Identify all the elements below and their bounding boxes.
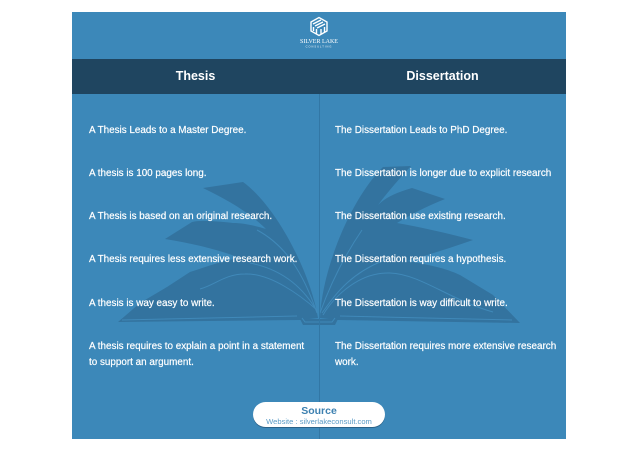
dissertation row 4: The Dissertation requires a hypothesis.: [335, 254, 506, 265]
heading: Dissertation: Dissertation: [406, 69, 479, 83]
heading: Thesis: Thesis: [176, 69, 215, 83]
thesis row 2: A thesis is 100 pages long.: [89, 168, 206, 179]
dissertation row 6: [334, 341, 556, 368]
column divider: [319, 94, 320, 439]
dissertation row 6: work.: [335, 357, 359, 368]
source website: Website : silverlakeconsult.com: [266, 417, 372, 426]
header band: [72, 59, 566, 94]
thesis row 5: A thesis is way easy to write.: [89, 298, 215, 309]
dissertation row 1: The Dissertation Leads to PhD Degree.: [335, 125, 507, 136]
thesis row 6: [88, 341, 304, 368]
pill: source shadow: [253, 403, 385, 428]
logo name: SILVER LAKE: [300, 39, 338, 45]
thesis row 6: A thesis requires to explain a point in a statement: [89, 341, 304, 352]
dissertation row 6: The Dissertation requires more extensive research: [335, 341, 556, 352]
book spine: [300, 319, 338, 325]
dissertation row 5: The Dissertation is way difficult to write.: [335, 298, 508, 309]
dissertation row 3: The Dissertation use existing research.: [335, 211, 506, 222]
thesis row 4: A Thesis requires less extensive research work.: [89, 254, 297, 265]
dissertation row 2: The Dissertation is longer due to explicit research: [335, 168, 551, 179]
thesis row 3: A Thesis is based on an original research.: [89, 211, 272, 222]
logo tagline: CONSULTING: [306, 44, 332, 48]
pill: source: [253, 402, 385, 427]
panel: comparison background: [72, 12, 566, 439]
thesis row 6: to support an argument.: [89, 357, 194, 368]
thesis row 1: A Thesis Leads to a Master Degree.: [89, 125, 246, 136]
icon: logo cube: [311, 18, 327, 36]
page curves: [122, 230, 512, 320]
source heading: Source: [301, 405, 337, 417]
icon: open book: [118, 166, 520, 325]
